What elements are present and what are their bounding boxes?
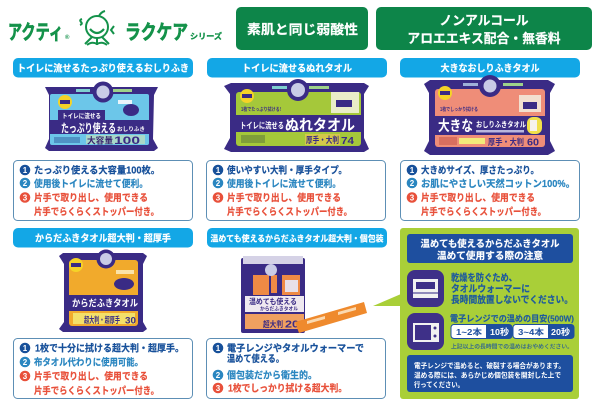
feature list: 電子レンジやタオルウォーマーで: [227, 342, 364, 354]
caution heading: 温めて使用する際の注意: [437, 250, 543, 262]
badge: non-alcohol aloe extract: アロエエキス配合・無香料: [407, 31, 561, 46]
panel: body towel extra large: [13, 228, 193, 398]
caution heading: [407, 234, 573, 263]
heading: トイレに流せるぬれタオル: [242, 62, 352, 74]
time chip: 1-2 pieces 10 seconds: [451, 324, 512, 338]
product package: blue: おしりふき: [117, 126, 145, 133]
warning text: [451, 271, 573, 306]
feature list: 大きめサイズ、厚さたっぷり。: [421, 164, 539, 176]
product package: warmable pack: 温めても使える: [249, 296, 297, 306]
panel: caution when warming: [400, 228, 579, 399]
heading: [400, 58, 580, 78]
product package: salmon: おしりふきタオル: [476, 119, 526, 129]
heading: 大きなおしりふきタオル: [440, 62, 540, 74]
time chip: 3-4 pieces 20 seconds: 3~4本: [518, 327, 545, 337]
product package: warmable pack: 20: [285, 320, 300, 330]
feature list: 使いやすい大判・厚手タイプ。: [227, 164, 347, 176]
product package: blue: トイレに流せる: [62, 111, 101, 120]
warning box: 電子レンジで温めると、破裂する場合があります。: [414, 361, 565, 370]
note: 上記以上の長時間での温めはおやめください。: [451, 342, 573, 350]
time chip: 3-4 pieces 20 seconds: 20秒: [551, 327, 571, 337]
microwave guide heading: 電子レンジでの温めの目安(500W): [450, 312, 574, 324]
panel: warmable body towel individually wrapped: [206, 228, 387, 398]
feature list: [14, 338, 192, 398]
product package: blue: 100: [114, 135, 140, 147]
heading: 温めても使えるからだふきタオル超大判・個包装: [210, 232, 384, 244]
product package: orange: 超大判・超厚手: [84, 315, 120, 325]
product package: blue: [45, 82, 158, 151]
feature list: 片手でらくらくストッパー付き。: [421, 205, 546, 218]
product package: salmon: 厚手・大判: [488, 137, 524, 147]
warning text: 長時間放置しないでください。: [451, 293, 573, 306]
product package: green: [224, 79, 369, 152]
feature list: 片手でらくらくストッパー付き。: [34, 384, 159, 397]
product package: orange: [59, 250, 147, 332]
product package: salmon: 大きな: [438, 118, 473, 135]
panel: flushable wipes: [13, 58, 193, 220]
product package: warmable pack: からだふきタオル: [260, 306, 298, 312]
product package: green: 74: [341, 135, 354, 147]
feature list: たっぷり使える大容量100枚。: [34, 164, 160, 176]
product package: salmon: [424, 75, 555, 155]
heading: トイレに流せるたっぷり使えるおしりふき: [17, 62, 189, 74]
heading: [207, 58, 387, 78]
arrow: callout pointer from towel to caution panel: [373, 294, 401, 306]
logo: Acty Rakucare series: ラクケア: [125, 21, 188, 44]
time chip: 3-4 pieces 20 seconds: [513, 324, 574, 338]
logo: Acty Rakucare series: ®: [65, 34, 70, 41]
heading: からだふきタオル超大判・超厚手: [35, 232, 171, 244]
icon: smiling mascot face: [80, 11, 114, 45]
product package: blue: たっぷり使える: [61, 121, 116, 135]
logo: Acty Rakucare series: [8, 11, 222, 45]
product package: green: 厚手・大判: [306, 135, 339, 145]
badge: weakly acidic: 素肌と同じ弱酸性: [247, 22, 358, 37]
feature list: 片手でらくらくストッパー付き。: [227, 205, 352, 218]
logo: Acty Rakucare series: シリーズ: [190, 31, 222, 41]
badge: non-alcohol aloe extract: ノンアルコール: [439, 13, 529, 28]
badge: non-alcohol aloe extract: [376, 7, 592, 50]
heading: [13, 228, 193, 248]
feature list: 温めて使える。: [227, 352, 284, 365]
feature list: 布タオル代わりに使用可能。: [34, 356, 143, 368]
icon: towel warmer: [407, 270, 444, 307]
product package: green: ぬれタオル: [285, 117, 355, 134]
feature list: 使用後トイレに流せて便利。: [227, 177, 341, 190]
warning box: 行ってください。: [414, 380, 464, 389]
feature list: 1枚でしっかり拭ける超大判。: [228, 382, 347, 394]
individual wrapped towel stick: [295, 302, 367, 333]
feature list: 片手でらくらくストッパー付き。: [34, 205, 159, 218]
warning text: 乾燥を防ぐため、: [451, 271, 517, 284]
time chip: 1-2 pieces 10 seconds: 1~2本: [456, 327, 483, 337]
feature list: [206, 160, 386, 220]
product package: warmable pack: 超大判: [263, 319, 283, 329]
feature list: [206, 338, 386, 398]
feature list: お肌にやさしい天然コットン100%。: [421, 177, 575, 190]
product package: salmon: 60: [527, 136, 539, 148]
product package: warmable pack: [241, 256, 305, 333]
product package: blue: 大容量: [87, 136, 113, 146]
feature list: 使用後トイレに流せて便利。: [34, 177, 148, 190]
feature list: 片手で取り出し、使用できる: [34, 191, 148, 204]
feature list: 片手で取り出し、使用できる: [34, 370, 148, 382]
panel: large wipe towel: [400, 58, 580, 220]
warning text: タオルウォーマーに: [451, 283, 530, 295]
product package: green: トイレに流せる: [240, 120, 284, 130]
product package: orange: 30: [125, 316, 136, 326]
caution heading: 温めても使えるからだふきタオル: [420, 238, 560, 250]
icon: microwave: [407, 313, 444, 350]
feature list: 1枚で十分に拭ける超大判・超厚手。: [35, 342, 184, 354]
feature list: [400, 160, 580, 220]
product package: salmon: 1枚でしっかり拭ける: [440, 106, 478, 113]
warning box: [407, 355, 573, 392]
panel: flushable wet towel: [206, 58, 387, 220]
feature list: 個包装だから衛生的。: [227, 368, 317, 382]
logo: Acty Rakucare series: アクティ: [8, 21, 63, 44]
feature list: 片手で取り出し、使用できる: [421, 191, 535, 204]
feature list: 片手で取り出し、使用できる: [227, 191, 341, 204]
heading: [13, 58, 193, 78]
product package: green: 1枚でたっぷり拭ける!: [241, 106, 281, 113]
warning box: 温める際には、あらかじめ個包装を開封した上で: [414, 370, 561, 380]
product package: orange: からだふきタオル: [72, 298, 138, 310]
feature list: [14, 160, 192, 220]
time chip: 1-2 pieces 10 seconds: 10秒: [490, 327, 510, 337]
badge: weakly acidic: [236, 7, 368, 50]
heading: [207, 228, 387, 248]
